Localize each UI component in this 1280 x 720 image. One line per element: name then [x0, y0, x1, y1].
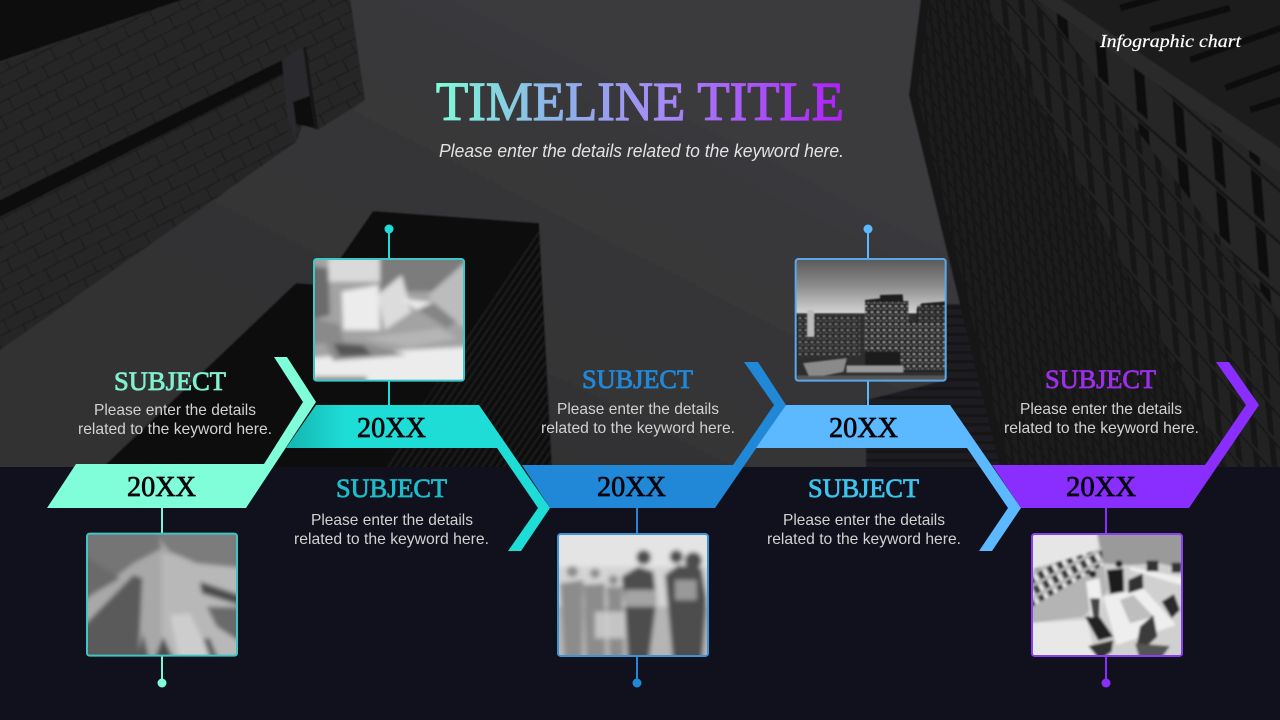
year label 3: 20XX — [597, 471, 666, 503]
subtitle: Please enter the details related to the keyword here. — [439, 141, 844, 161]
left brick building — [0, 0, 365, 357]
photo 5: team around a table — [1031, 533, 1183, 657]
text block 4: related to the keyword here. — [767, 531, 961, 548]
text block 1 — [78, 366, 272, 438]
text block 5: related to the keyword here. — [1004, 420, 1199, 437]
text block 4 — [767, 473, 961, 548]
chevron 3: blue — [522, 362, 786, 508]
text block 2: Please enter the details — [311, 512, 473, 529]
centre dark building — [100, 211, 552, 470]
text block 3: related to the keyword here. — [541, 420, 735, 437]
photo 3: silhouettes of people — [557, 533, 709, 657]
chevron 4: light blue — [756, 405, 1021, 551]
text block 4: Please enter the details — [783, 512, 945, 529]
connector 5 — [1102, 507, 1110, 688]
text block 1: SUBJECT — [114, 366, 226, 396]
connector lines and dots — [158, 224, 1110, 688]
text block 3: Please enter the details — [557, 401, 719, 418]
lower dark band — [0, 467, 1280, 720]
photo 4: city at night — [790, 257, 952, 385]
right tall building facade — [913, 0, 1280, 470]
chevron 5: purple — [992, 362, 1259, 508]
lower right secondary building — [866, 304, 1010, 470]
text block 5: SUBJECT — [1045, 364, 1156, 394]
text block 2: related to the keyword here. — [294, 531, 489, 548]
year label 1: 20XX — [127, 471, 196, 503]
chevron 2: teal — [286, 405, 550, 551]
text block 2: SUBJECT — [336, 473, 447, 503]
text block 3: SUBJECT — [582, 364, 693, 394]
text block 1: Please enter the details — [94, 402, 256, 419]
text block 5 — [1004, 364, 1199, 437]
year label 5: 20XX — [1066, 471, 1136, 503]
background photo: city buildings — [0, 0, 1280, 470]
photo 1: skyscrapers from below — [86, 532, 238, 657]
connector 3 — [632, 507, 642, 688]
text block 3 — [541, 364, 735, 437]
chevron 1: mint — [47, 357, 316, 508]
text block 2 — [294, 473, 489, 548]
photo 2: hands over laptop — [313, 258, 465, 382]
text block 5: Please enter the details — [1020, 401, 1182, 418]
small heading: Infographic chart: Infographic chart — [1099, 31, 1242, 51]
title: TIMELINE TITLE — [436, 71, 844, 132]
connector 4 — [864, 224, 872, 406]
text block 4: SUBJECT — [808, 473, 919, 503]
year label 2: 20XX — [357, 412, 426, 444]
connector 2 — [384, 224, 394, 406]
text block 1: related to the keyword here. — [78, 421, 272, 438]
year label 4: 20XX — [829, 412, 898, 444]
left dark corner — [0, 0, 212, 65]
connector 1 — [158, 507, 166, 688]
